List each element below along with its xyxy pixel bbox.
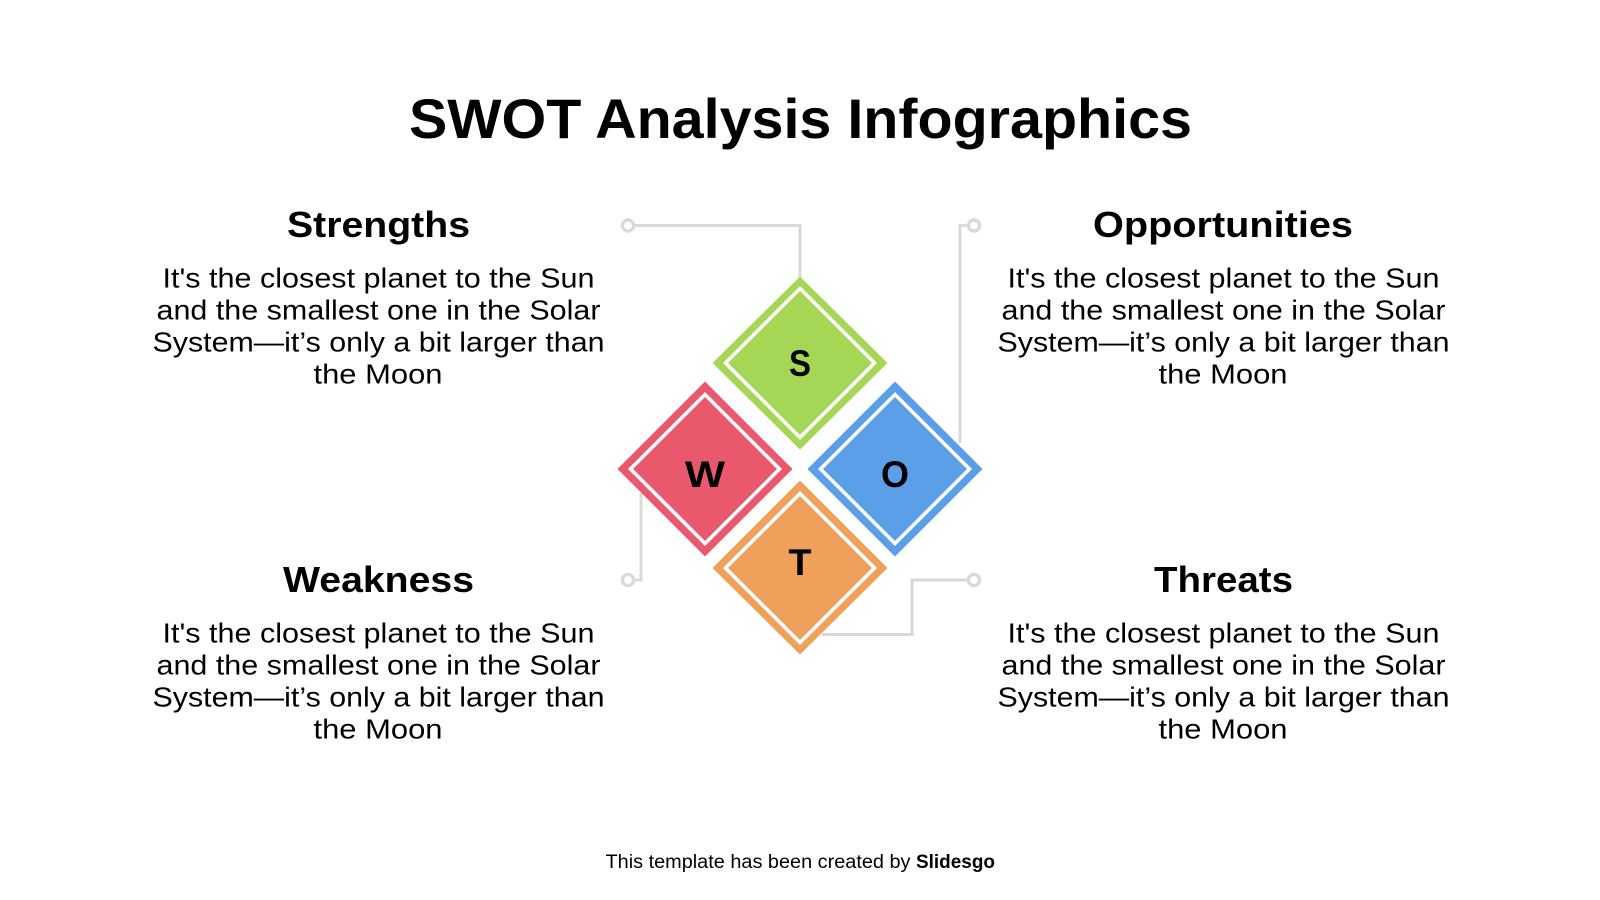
text block: threats (998, 618, 1450, 744)
diamond: T: T (788, 542, 812, 583)
panel: threats (998, 559, 1450, 744)
heading: opportunities: Opportunities (1093, 204, 1353, 245)
diamond: S: S (789, 343, 811, 384)
footer credit: Slidesgo (916, 852, 995, 873)
diamond: W: W (685, 454, 725, 495)
text block: weakness: System—it’s only a bit larger than (152, 682, 604, 712)
text block: strengths: the Moon (314, 358, 442, 390)
text block: threats: and the smallest one in the Solar (1002, 650, 1446, 680)
diamond: S (712, 276, 888, 450)
diamond: T (712, 480, 888, 654)
heading: strengths: Strengths (287, 204, 470, 245)
text block: threats: System—it’s only a bit larger than (998, 682, 1450, 712)
footer credit: This template has been created by (606, 852, 911, 873)
connector: threats (822, 574, 980, 634)
title: SWOT Analysis Infographics (409, 87, 1192, 150)
text block: weakness (152, 618, 604, 744)
text block: weakness: the Moon (314, 714, 442, 744)
panel: opportunities (998, 204, 1450, 390)
text block: strengths: and the smallest one in the Solar (156, 294, 600, 326)
heading: threats: Threats (1154, 559, 1293, 600)
text block: strengths: It's the closest planet to the Sun (162, 262, 594, 294)
connector: strengths (622, 220, 800, 277)
panel: strengths (152, 204, 604, 390)
text block: threats: It's the closest planet to the Sun (1008, 618, 1440, 648)
diamond: O: O (881, 454, 909, 495)
diamond: O (808, 382, 982, 556)
text block: threats: the Moon (1158, 714, 1288, 744)
connector: opportunities (960, 220, 980, 443)
text block: weakness: and the smallest one in the Solar (156, 650, 600, 680)
heading: weakness: Weakness (283, 559, 474, 600)
text block: opportunities: It's the closest planet to the Sun (1008, 262, 1440, 294)
text block: weakness: It's the closest planet to the Sun (162, 618, 594, 648)
text block: strengths (152, 262, 604, 390)
text block: opportunities (998, 262, 1450, 390)
text block: opportunities: the Moon (1158, 358, 1288, 390)
connector: weakness (622, 493, 641, 586)
diamond: W (618, 382, 792, 556)
text block: strengths: System—it’s only a bit larger than (152, 326, 604, 358)
text block: opportunities: and the smallest one in the Solar (1002, 294, 1446, 326)
panel: weakness (152, 559, 604, 744)
text block: opportunities: System—it’s only a bit larger than (998, 326, 1450, 358)
